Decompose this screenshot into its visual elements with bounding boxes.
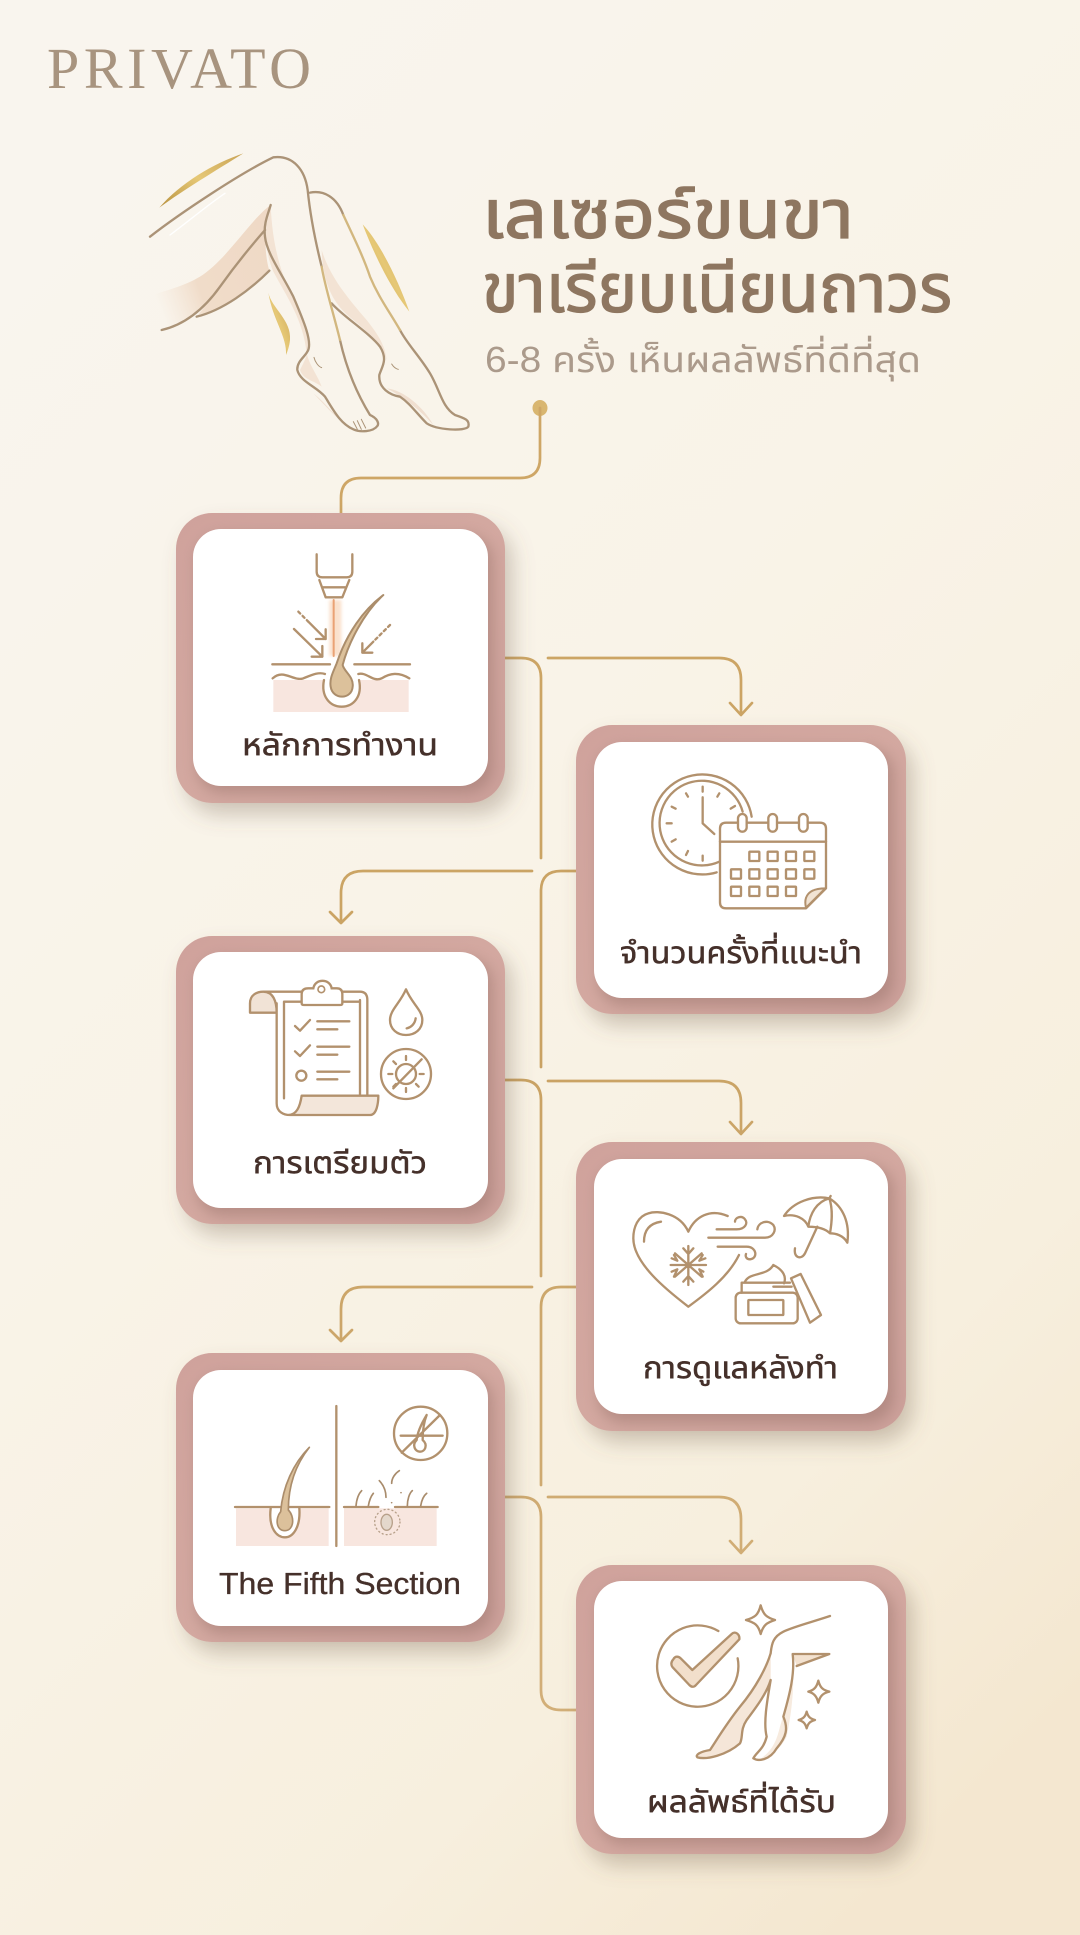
title: ขาเรียบเนียนถาวร [482,251,952,327]
label: การเตรียมตัว [253,1147,427,1180]
connector: card 3 to card 4 [505,1080,752,1276]
connector: card 1 to card 2 [505,658,752,858]
panel: card 4 aftercare [576,1142,906,1431]
icon: clock and calendar [652,774,826,908]
label: จำนวนครั้งที่แนะนำ [620,932,862,970]
panel: card 1 working principle [176,513,505,803]
panel: card 3 preparation [176,936,505,1224]
connector: card 5 to card 6 [505,1497,752,1710]
icon: checklist, drop and no sun [250,981,431,1115]
connector: card 2 to card 3 [330,871,576,1067]
panel: card 5 the fifth section [176,1353,505,1642]
title [482,177,952,327]
label: การดูแลหลังทำ [643,1352,838,1386]
icon: before and after hair follicle [235,1406,447,1546]
panel: card 6 results [576,1565,906,1854]
panel: card 2 number of sessions [576,725,906,1014]
hero legs illustration [150,153,469,431]
subtitle: 6-8 ครั้ง เห็นผลลัพธ์ที่ดีที่สุด [485,335,921,381]
label: หลักการทำงาน [242,729,438,762]
connector: title to card 1 [341,400,548,514]
icon: heart, wind, umbrella and cream [633,1196,848,1323]
label: The Fifth Section [219,1566,461,1601]
connector: card 4 to card 5 [330,1287,576,1485]
brand logo: PRIVATO [47,36,311,101]
label: ผลลัพธ์ที่ได้รับ [647,1781,836,1819]
title: เลเซอร์ขนขา [482,177,854,253]
icon: laser on hair follicle [272,554,410,712]
icon: check mark and smooth legs [657,1605,830,1760]
